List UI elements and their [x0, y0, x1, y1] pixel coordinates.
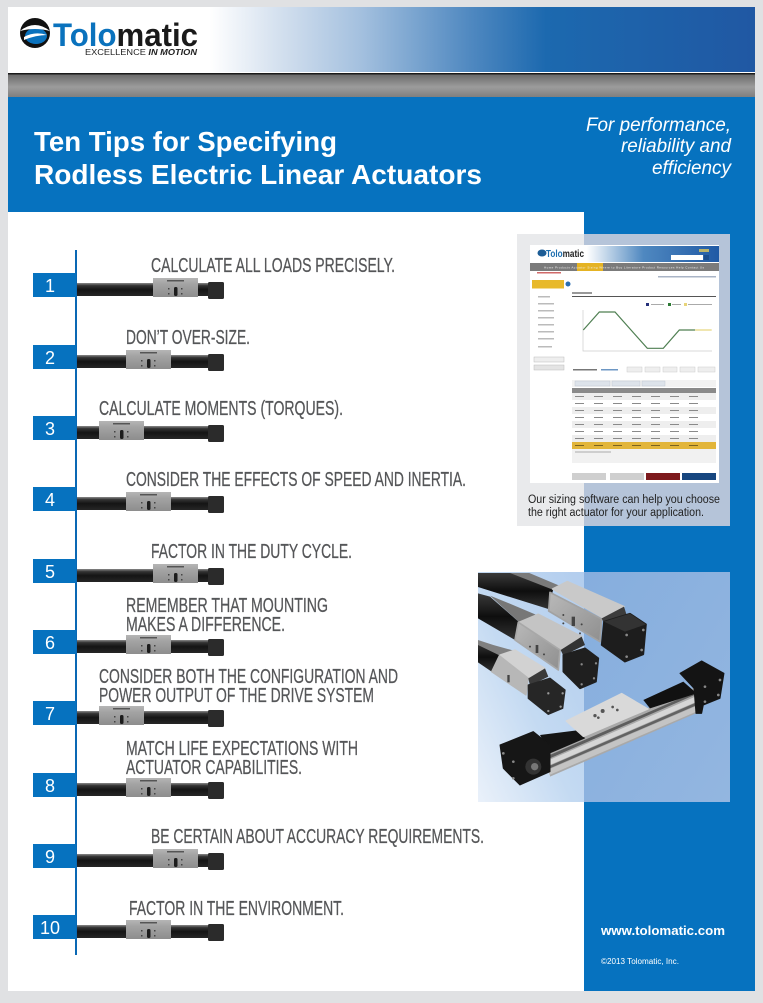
tip 4 [33, 469, 466, 513]
tip 5 [33, 541, 352, 585]
copyright: ©2013 Tolomatic, Inc. [601, 957, 679, 966]
tip 2 [33, 327, 250, 371]
caption: Our sizing software can help you choose [528, 494, 720, 506]
icon: large actuator top [478, 573, 646, 662]
tip 6 [33, 595, 328, 656]
tip 9: BE CERTAIN ABOUT ACCURACY REQUIREMENTS. [151, 826, 484, 848]
heading: Ten Tips for Specifying [34, 126, 337, 157]
icon: small actuator [478, 640, 565, 714]
software screenshot: Tolomatic [546, 248, 584, 260]
timeline vertical line [75, 250, 77, 955]
tip 4: CONSIDER THE EFFECTS OF SPEED AND INERTIA. [126, 469, 466, 491]
tip 7: POWER OUTPUT OF THE DRIVE SYSTEM [99, 685, 374, 707]
tip 8: ACTUATOR CAPABILITIES. [126, 757, 302, 779]
panel: actuator product photo [478, 572, 730, 802]
tip 2: DON’T OVER-SIZE. [126, 327, 250, 349]
tip 10: FACTOR IN THE ENVIRONMENT. [129, 898, 344, 920]
logo: Tolomatic: Tolomatic [53, 17, 198, 53]
tip 9: 9 [45, 847, 55, 867]
header banner [8, 7, 755, 97]
tagline: reliability and [621, 136, 732, 157]
caption [528, 494, 720, 519]
tip 3: CALCULATE MOMENTS (TORQUES). [99, 398, 343, 420]
caption: the right actuator for your application. [528, 507, 704, 519]
tip 2: 2 [45, 348, 55, 368]
tip 7: 7 [45, 704, 55, 724]
tip 10: 10 [40, 918, 60, 938]
tip 1 [33, 255, 395, 299]
tip 7: CONSIDER BOTH THE CONFIGURATION AND [99, 666, 398, 688]
tagline [586, 115, 732, 179]
title banner [8, 97, 755, 212]
tip 7 [33, 666, 398, 727]
logo: Tolomatic: EXCELLENCE IN MOTION [85, 47, 198, 57]
website url: www.tolomatic.com [600, 923, 725, 938]
software screenshot: Home Products Actuator Sizing Where to Buy Literature Product Resources Help Contact Us [544, 266, 704, 270]
tip 4: 4 [45, 490, 55, 510]
tip 3 [33, 398, 343, 442]
tip 1: CALCULATE ALL LOADS PRECISELY. [151, 255, 395, 277]
tip 6: 6 [45, 633, 55, 653]
blue side column [584, 212, 755, 991]
icon: medium actuator [478, 593, 598, 688]
tip 6: MAKES A DIFFERENCE. [126, 614, 285, 636]
software screenshot [530, 246, 719, 480]
tip 5: FACTOR IN THE DUTY CYCLE. [151, 541, 352, 563]
tip 3: 3 [45, 419, 55, 439]
tip 8: MATCH LIFE EXPECTATIONS WITH [126, 738, 358, 760]
tip 6: REMEMBER THAT MOUNTING [126, 595, 328, 617]
heading [34, 126, 482, 190]
tagline: efficiency [652, 158, 732, 179]
tip 5: 5 [45, 562, 55, 582]
tip 1: 1 [45, 276, 55, 296]
white content panel [8, 212, 584, 991]
heading: Rodless Electric Linear Actuators [34, 159, 482, 190]
tip 8 [33, 738, 358, 799]
icon: long rail actuator [500, 661, 724, 785]
tip 9 [33, 826, 484, 870]
tip 10 [33, 898, 344, 941]
tip 8: 8 [45, 776, 55, 796]
tagline: For performance, [586, 115, 731, 136]
panel: sizing software [517, 234, 730, 526]
